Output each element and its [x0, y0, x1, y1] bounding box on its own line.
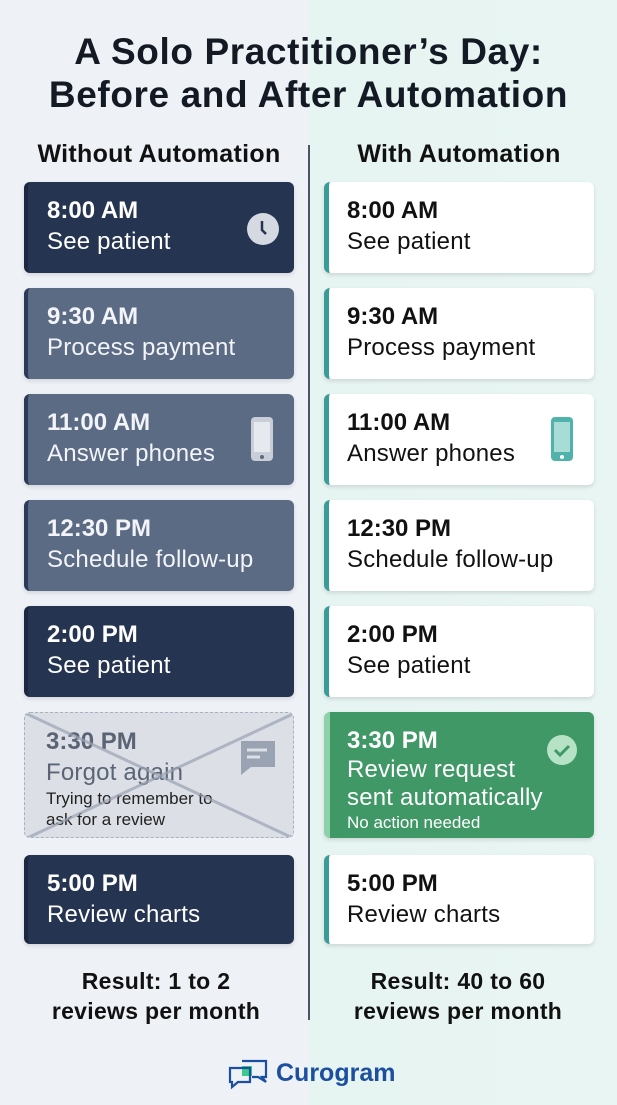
left card 12:30 [24, 500, 294, 591]
right card 9:30 [324, 288, 594, 379]
right card 11:00 [324, 394, 594, 485]
right card 8:00: 8:00 AM [347, 197, 438, 224]
right card 2:00: 2:00 PM [347, 621, 438, 648]
right card 3:30 automated: sent automatically [347, 784, 543, 811]
result left [52, 968, 260, 1024]
left card 8:00 [24, 182, 294, 273]
result right [354, 968, 562, 1024]
left card 9:30 [24, 288, 294, 379]
right card 9:30: 9:30 AM [347, 303, 438, 330]
left card 2:00: See patient [47, 652, 171, 679]
right card 12:30: Schedule follow-up [347, 546, 553, 573]
right card 5:00: Review charts [347, 901, 500, 928]
left card 2:00: 2:00 PM [47, 621, 138, 648]
left card 8:00: See patient [47, 228, 171, 255]
right card 11:00: Answer phones [347, 440, 515, 467]
header: without: Without Automation [37, 140, 281, 168]
right card 3:30 automated: 3:30 PM [347, 727, 438, 754]
right card 2:00: See patient [347, 652, 471, 679]
left card 9:30: 9:30 AM [47, 303, 138, 330]
icon: logo chat [228, 1060, 268, 1090]
logo: Curogram [276, 1059, 395, 1087]
right card 12:30: 12:30 PM [347, 515, 451, 542]
title: A Solo Practitioner’s Day: [74, 31, 543, 72]
left card 8:00: 8:00 AM [47, 197, 138, 224]
right card 11:00: 11:00 AM [347, 409, 450, 436]
left card 3:30 forgot: Trying to remember to [46, 789, 213, 808]
left card 3:30 forgot: ask for a review [46, 810, 165, 829]
left card 3:30 forgot: Forgot again [46, 759, 183, 786]
left card 3:30 forgot [24, 712, 294, 838]
right card 3:30 automated: No action needed [347, 813, 480, 832]
result right: reviews per month [354, 998, 562, 1024]
right card 3:30 automated [324, 712, 594, 838]
left card 5:00: 5:00 PM [47, 870, 138, 897]
icon: clock [247, 213, 279, 245]
right card 5:00 [324, 855, 594, 944]
title: Before and After Automation [49, 74, 568, 115]
right card 9:30: Process payment [347, 334, 535, 361]
left card 11:00 [24, 394, 294, 485]
icon: phone teal [551, 417, 573, 461]
title [49, 31, 568, 115]
left card 9:30: Process payment [47, 334, 235, 361]
right card 12:30 [324, 500, 594, 591]
icon: check [547, 735, 577, 765]
left card 5:00 [24, 855, 294, 944]
right card 2:00 [324, 606, 594, 697]
logo [228, 1059, 395, 1090]
right card 8:00: See patient [347, 228, 471, 255]
right card 3:30 automated: Review request [347, 756, 515, 783]
left card 3:30 forgot: 3:30 PM [46, 728, 137, 755]
divider [308, 145, 310, 1020]
left card 5:00: Review charts [47, 901, 200, 928]
result right: Result: 40 to 60 [371, 968, 545, 994]
result left: Result: 1 to 2 [82, 968, 230, 994]
icon: chat [241, 741, 275, 775]
header: with: With Automation [357, 140, 561, 168]
left card 2:00 [24, 606, 294, 697]
icon: cross [26, 713, 292, 837]
right card 5:00: 5:00 PM [347, 870, 438, 897]
left card 11:00: 11:00 AM [47, 409, 150, 436]
icon: phone [251, 417, 273, 461]
left card 11:00: Answer phones [47, 440, 215, 467]
result left: reviews per month [52, 998, 260, 1024]
left card 12:30: 12:30 PM [47, 515, 151, 542]
right card 8:00 [324, 182, 594, 273]
left card 12:30: Schedule follow-up [47, 546, 253, 573]
